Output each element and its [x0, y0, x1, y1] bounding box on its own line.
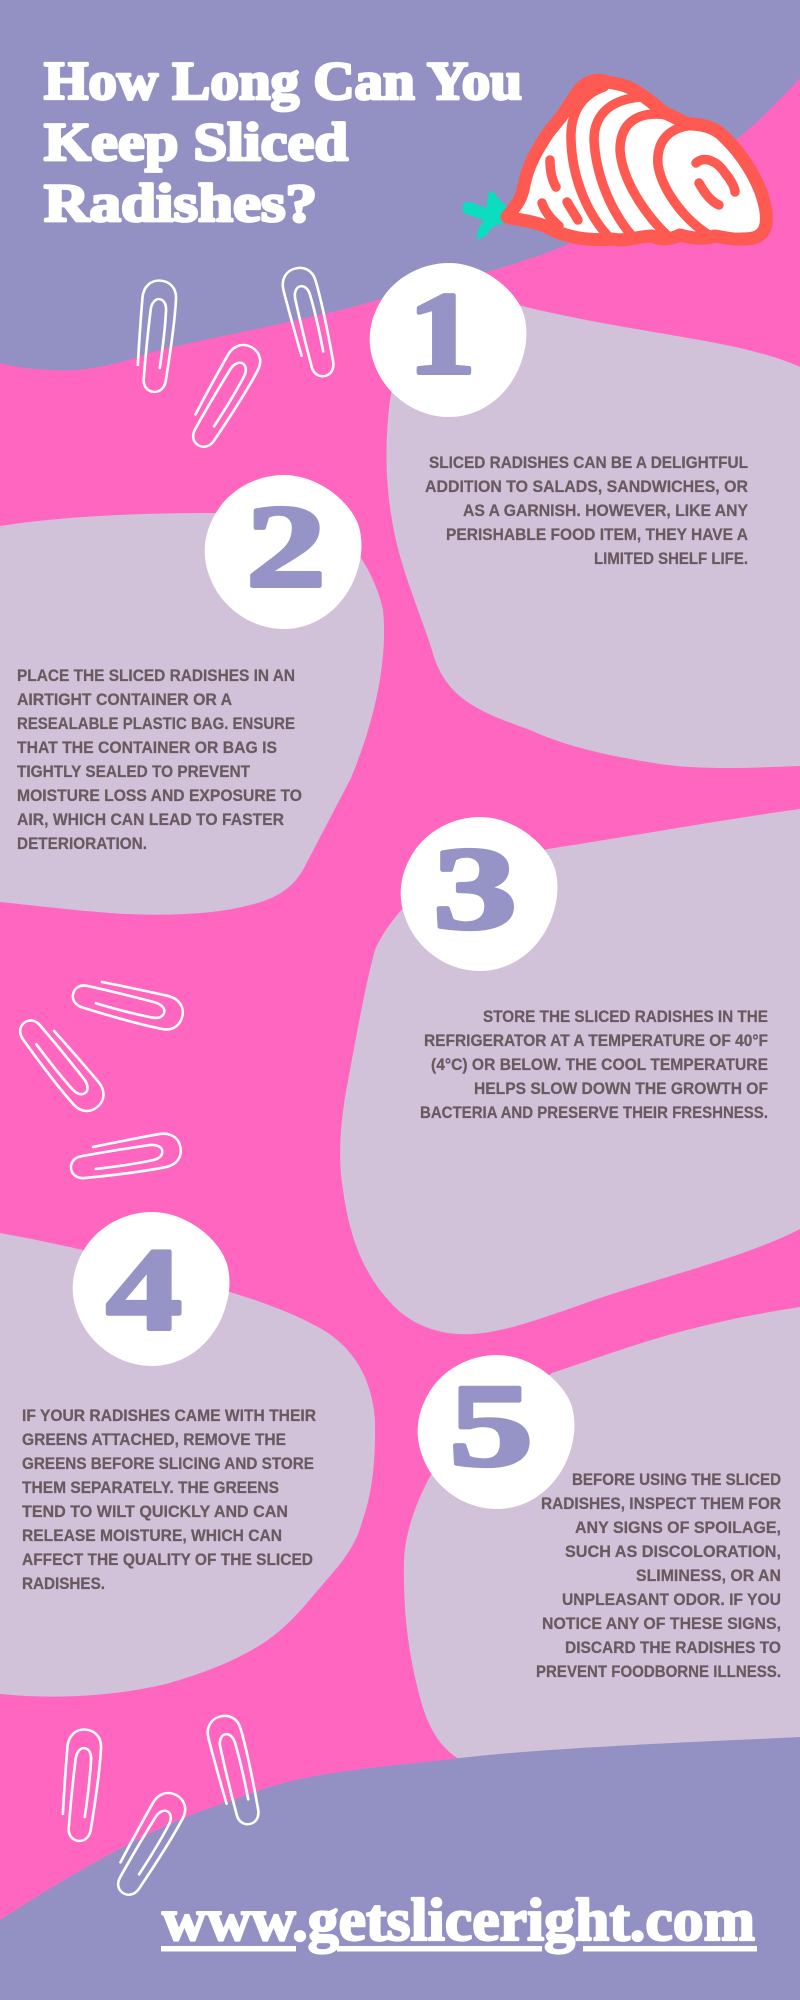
text block: step 1: [425, 453, 749, 568]
title: How Long Can You: [44, 51, 522, 111]
number badge 3: [401, 817, 557, 971]
number badge 4: 4: [106, 1225, 182, 1355]
top purple header shape: [0, 0, 800, 370]
title: Keep Sliced: [44, 112, 348, 172]
text block: step 4: RADISHES.: [22, 1574, 105, 1593]
text block: step 5: ANY SIGNS OF SPOILAGE,: [575, 1518, 781, 1537]
title: [44, 51, 522, 233]
number badge 3: 3: [433, 824, 517, 954]
radish slice lines: [542, 87, 735, 238]
text block: step 4: AFFECT THE QUALITY OF THE SLICED: [22, 1550, 313, 1569]
icon: sliced radish: [463, 80, 766, 240]
panel: step 3 background: [340, 809, 800, 1334]
text block: step 2: RESEALABLE PLASTIC BAG. ENSURE: [17, 714, 295, 733]
text block: step 2: PLACE THE SLICED RADISHES IN AN: [17, 666, 295, 685]
paperclip: [202, 1712, 267, 1829]
text block: step 2: [17, 666, 302, 853]
text block: step 3: (4°C) OR BELOW. THE COOL TEMPERATURE: [431, 1055, 768, 1074]
text block: step 3: REFRIGERATOR AT A TEMPERATURE OF 40°F: [424, 1031, 768, 1050]
text block: step 3: HELPS SLOW DOWN THE GROWTH OF: [474, 1079, 768, 1098]
number badge 4: [73, 1212, 229, 1366]
text block: step 2: MOISTURE LOSS AND EXPOSURE TO: [17, 786, 302, 805]
text block: step 5: [536, 1470, 781, 1681]
radish leaves: [463, 191, 508, 239]
text block: step 4: TEND TO WILT QUICKLY AND CAN: [22, 1502, 288, 1521]
number badge 1: [370, 263, 526, 417]
paperclip group bottom: [61, 1712, 267, 1902]
text block: step 1: SLICED RADISHES CAN BE A DELIGHTFUL: [429, 453, 748, 472]
paperclip group top: [136, 264, 342, 454]
number badge 1: 1: [408, 268, 476, 399]
paperclip: [68, 1129, 184, 1186]
text block: step 1: LIMITED SHELF LIFE.: [594, 549, 748, 568]
text block: step 3: STORE THE SLICED RADISHES IN THE: [483, 1007, 768, 1026]
panel: step 4 background: [0, 1233, 375, 1697]
panel: step 5 background: [404, 1307, 800, 1765]
text block: step 4: THEM SEPARATELY. THE GREENS: [22, 1478, 279, 1497]
panel: step 2 background: [0, 513, 384, 915]
text block: step 2: AIRTIGHT CONTAINER OR A: [17, 690, 232, 709]
text block: step 2: TIGHTLY SEALED TO PREVENT: [17, 762, 251, 781]
text block: step 4: RELEASE MOISTURE, WHICH CAN: [22, 1526, 282, 1545]
footer website link: www.getsliceright.com: [162, 1887, 755, 1953]
text block: step 2: DETERIORATION.: [17, 834, 147, 853]
paperclip: [11, 1012, 111, 1118]
text block: step 5: SLIMINESS, OR AN: [636, 1566, 781, 1585]
panel: step 1 background: [386, 290, 800, 768]
text block: step 2: AIR, WHICH CAN LEAD TO FASTER: [17, 810, 284, 829]
text block: step 5: RADISHES, INSPECT THEM FOR: [541, 1494, 781, 1513]
paperclip: [61, 1729, 102, 1842]
text block: step 5: SUCH AS DISCOLORATION,: [565, 1542, 781, 1561]
radish body: [507, 80, 766, 240]
text block: step 5: UNPLEASANT ODOR. IF YOU: [562, 1590, 781, 1609]
text block: step 4: IF YOUR RADISHES CAME WITH THEIR: [22, 1406, 316, 1425]
text block: step 1: ADDITION TO SALADS, SANDWICHES, OR: [425, 477, 748, 496]
paperclip: [136, 280, 177, 393]
number badge 5: [418, 1355, 574, 1509]
text block: step 4: GREENS ATTACHED, REMOVE THE: [22, 1430, 286, 1449]
text block: step 4: GREENS BEFORE SLICING AND STORE: [22, 1454, 314, 1473]
text block: step 5: NOTICE ANY OF THESE SIGNS,: [542, 1614, 781, 1633]
bottom purple footer shape: [0, 1737, 800, 2000]
paperclip group middle: [11, 977, 186, 1186]
number badge 2: [205, 475, 361, 629]
paperclip: [277, 264, 342, 381]
text block: step 1: AS A GARNISH. HOWEVER, LIKE ANY: [463, 501, 749, 520]
number badge 5: 5: [449, 1361, 533, 1491]
number badge 2: 2: [246, 482, 326, 612]
text block: step 1: PERISHABLE FOOD ITEM, THEY HAVE A: [446, 525, 748, 544]
paperclip: [108, 1787, 191, 1902]
text block: step 3: [420, 1007, 768, 1122]
title: Radishes?: [44, 173, 317, 233]
paperclip: [183, 339, 266, 454]
text block: step 4: [22, 1406, 316, 1593]
text block: step 5: DISCARD THE RADISHES TO: [565, 1638, 781, 1657]
text block: step 2: THAT THE CONTAINER OR BAG IS: [17, 738, 277, 757]
paperclip: [70, 977, 186, 1032]
